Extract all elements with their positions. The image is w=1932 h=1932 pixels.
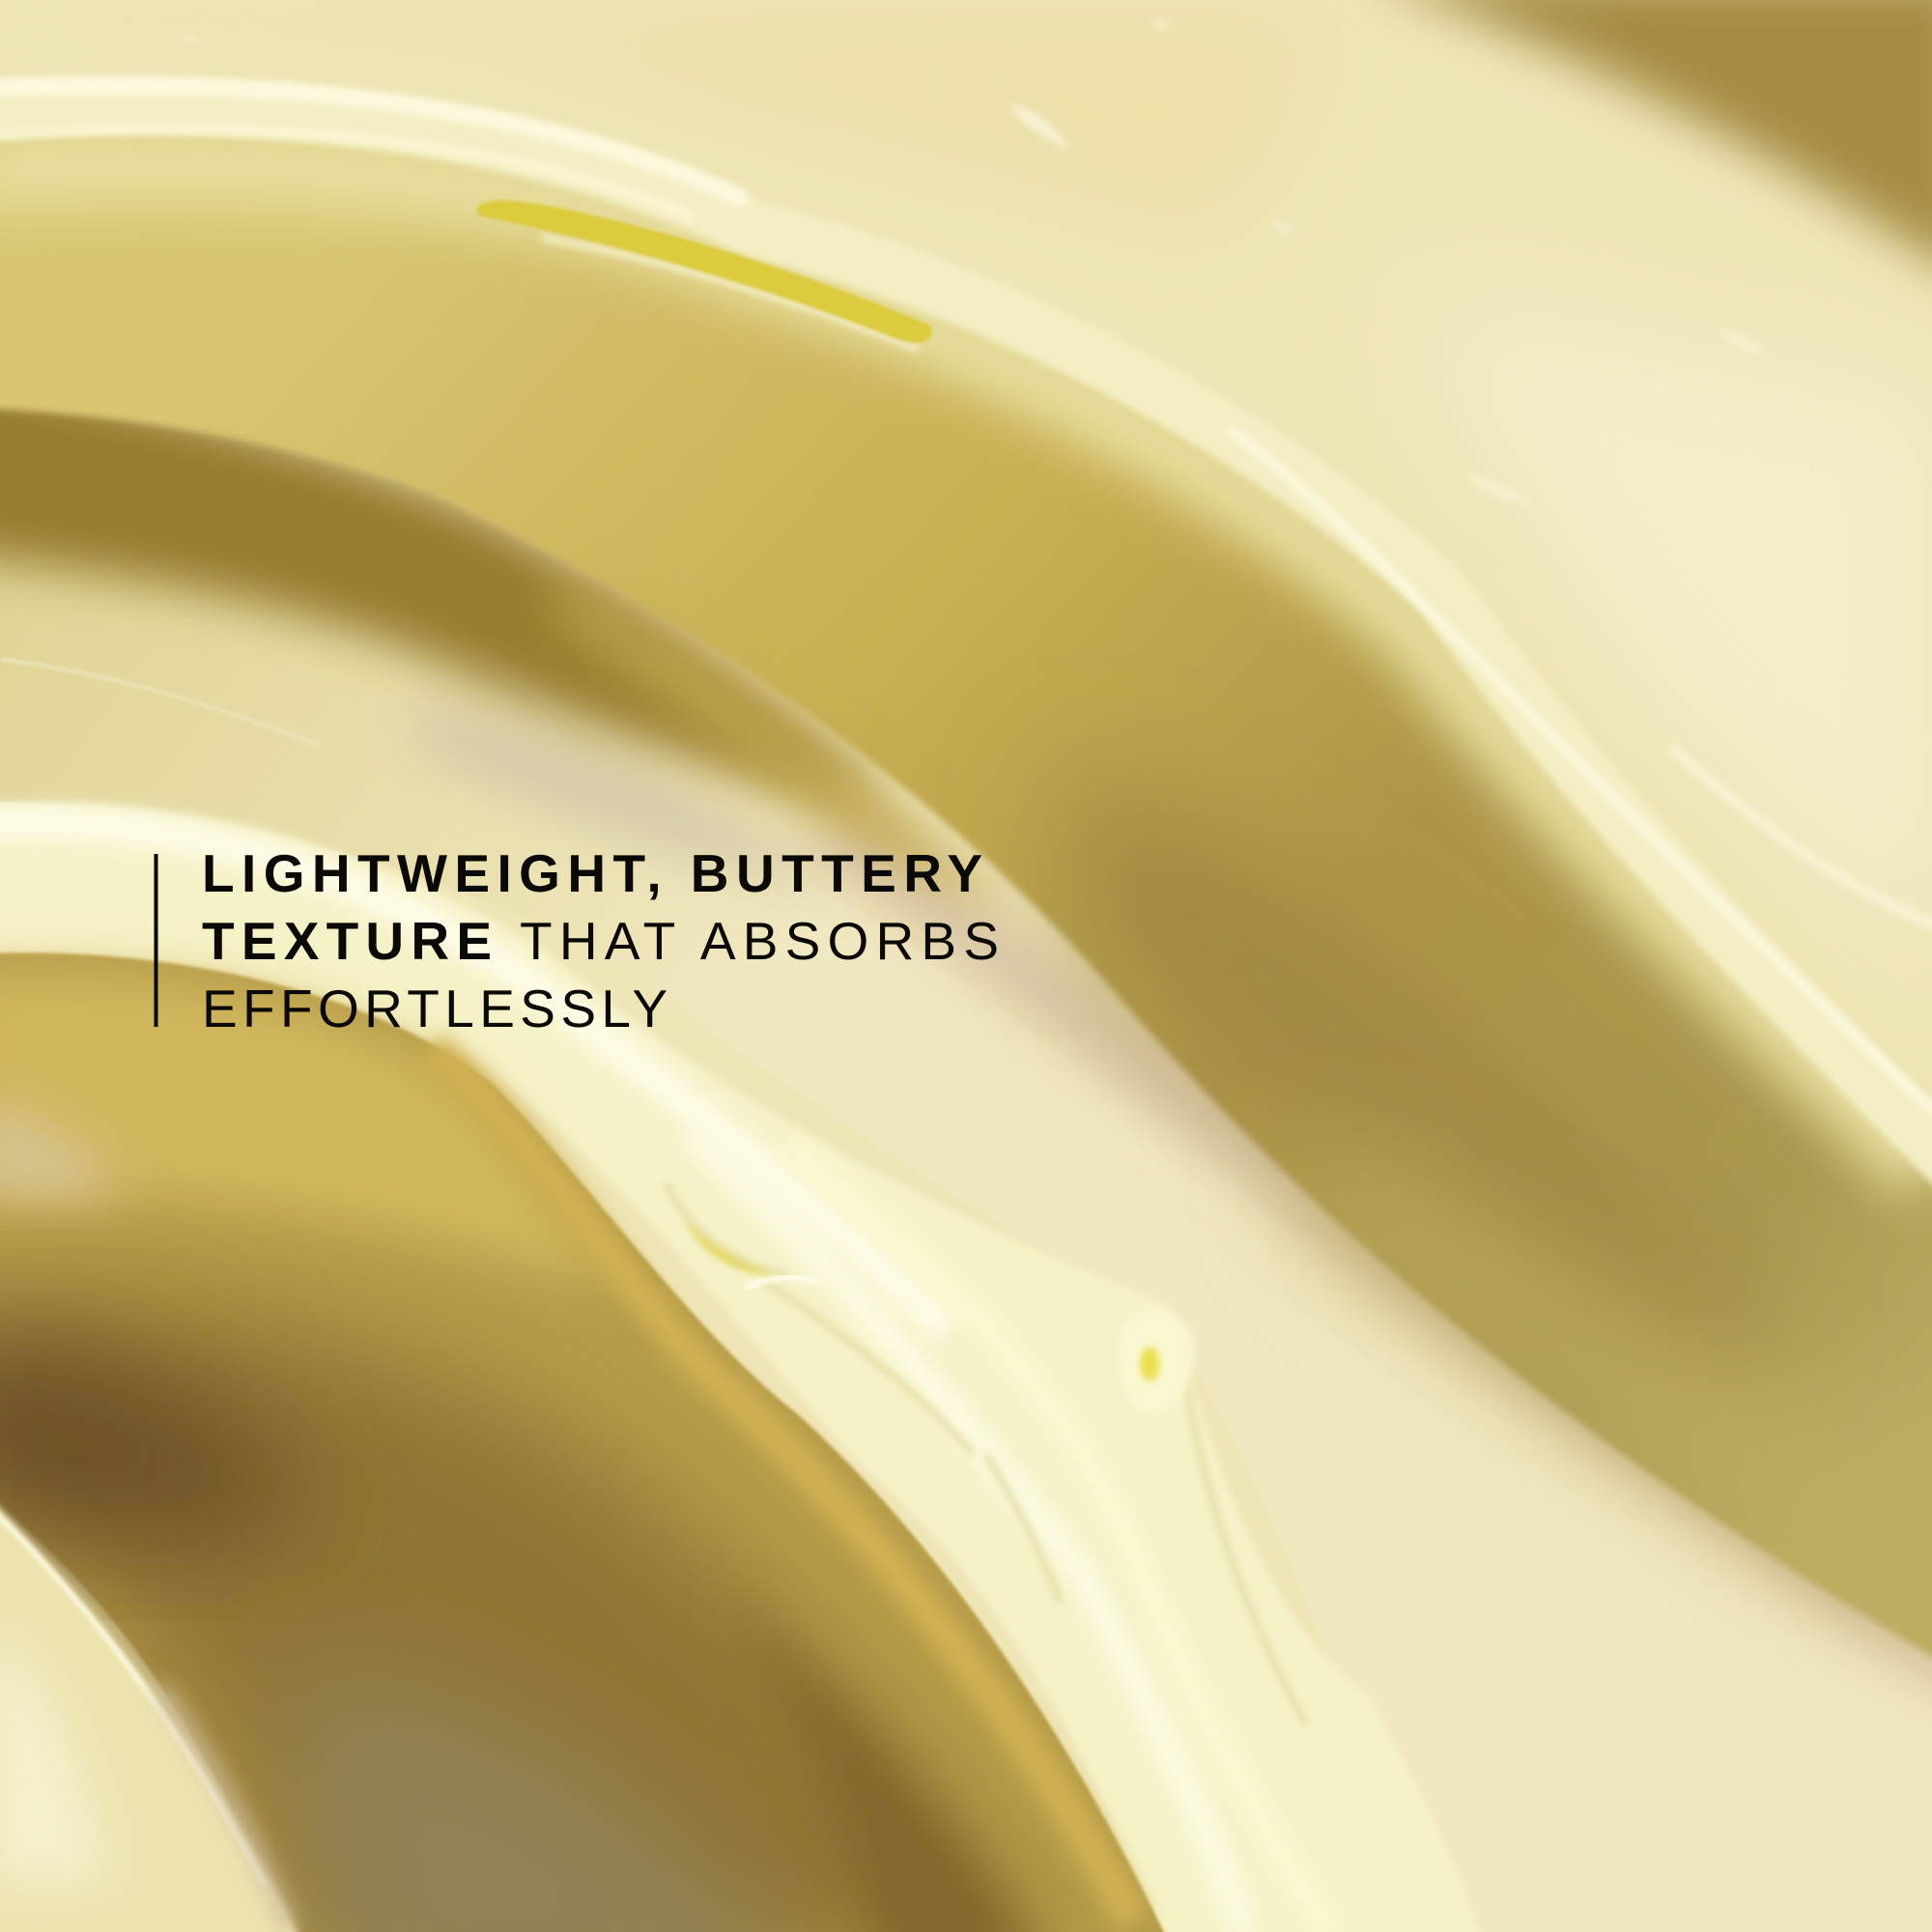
lower ridge highlight bbox=[0, 804, 1491, 1932]
headline line 1: LIGHTWEIGHT, BUTTERY bbox=[202, 843, 982, 903]
headline line 2 regular: THAT ABSORBS bbox=[520, 911, 999, 971]
shaded centre of band bbox=[1060, 764, 1775, 1405]
yellow spot on peak bbox=[1120, 1310, 1194, 1414]
headline line 3: EFFORTLESSLY bbox=[202, 979, 668, 1038]
top ridge highlight bbox=[0, 85, 1932, 1182]
pink shadow along gold band bbox=[788, 813, 1932, 1725]
yellow streak bbox=[477, 200, 931, 349]
mid brown body bbox=[0, 1304, 1047, 1932]
top right dark shadow bbox=[1368, 0, 1932, 283]
bottom left cream corner bbox=[0, 1472, 314, 1932]
dark olive shadow under band bbox=[0, 370, 887, 801]
pale strip beneath ridge bbox=[0, 163, 1932, 1171]
pale sheen line on mid cream bbox=[0, 659, 321, 746]
darker gold lower area bbox=[554, 579, 1010, 912]
dark brown shadow in mound bbox=[0, 1331, 321, 1538]
small yellow fleck bbox=[684, 1220, 777, 1275]
grey brown lower reflection bbox=[283, 1676, 813, 1932]
grey sheen on mid cream bbox=[407, 702, 838, 887]
headline line 2 bold: TEXTURE bbox=[202, 911, 492, 971]
vertical rule bbox=[155, 854, 158, 1027]
bright yellow rim of mound bbox=[431, 1047, 1133, 1922]
specks on upper surface bbox=[185, 17, 1766, 505]
middle cream band bbox=[0, 394, 1932, 1932]
lower right lighter edge of band bbox=[1293, 1146, 1932, 1627]
lower left gold mound bbox=[0, 952, 1182, 1932]
dark amber lower right shade bbox=[715, 1589, 1047, 1932]
light gold top of mound bbox=[0, 971, 616, 1293]
pale reflection at left bbox=[0, 1096, 129, 1199]
